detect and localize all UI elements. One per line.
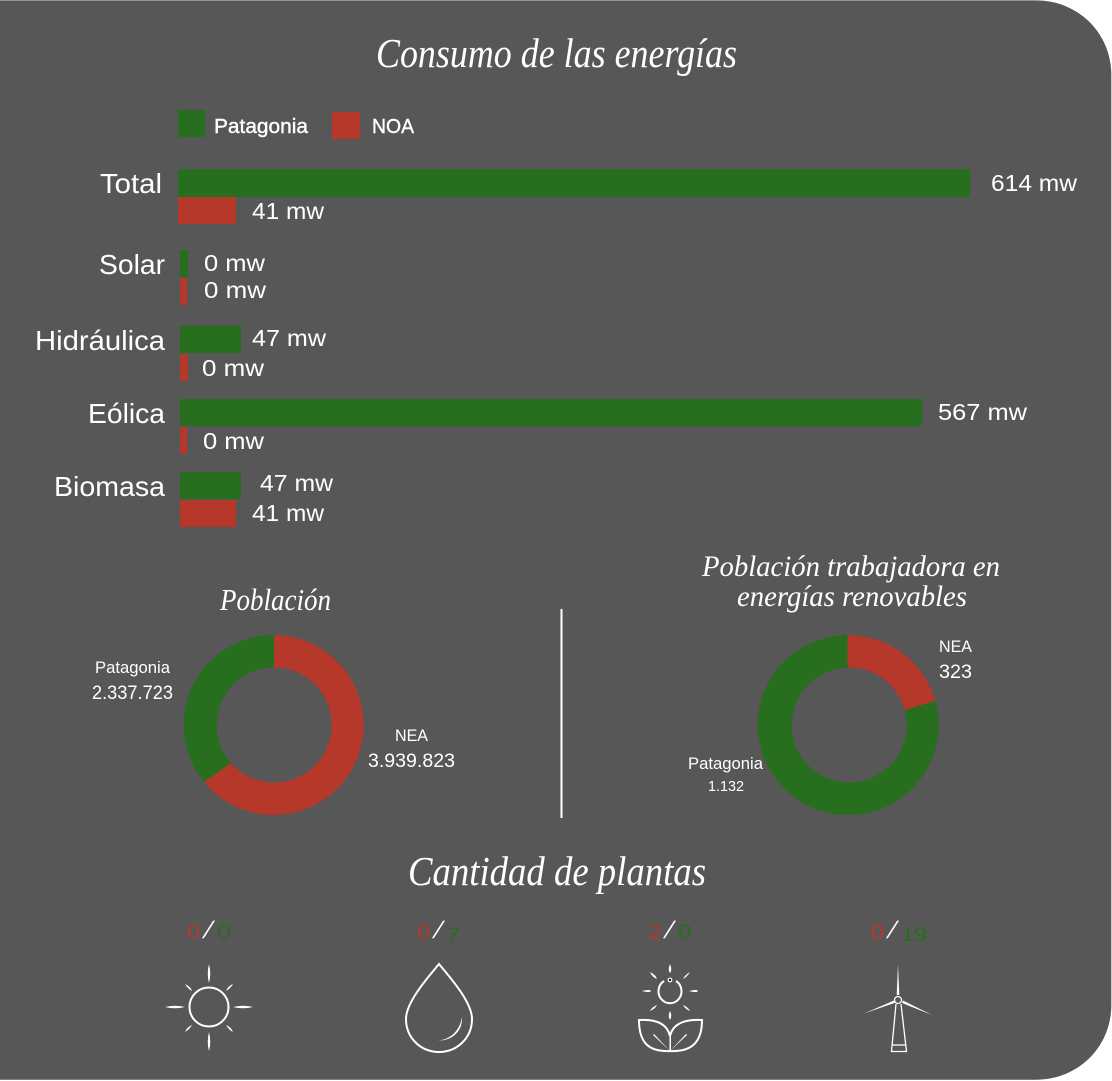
counts: solar: / bbox=[200, 918, 216, 944]
counts: solar: 0 bbox=[187, 921, 200, 944]
legend: Patagonia bbox=[214, 116, 309, 138]
donut chart: población: Patagonia bbox=[95, 659, 171, 677]
row: Eólica: 567 mw bbox=[938, 399, 1027, 425]
divider bbox=[560, 609, 562, 818]
heading: población: Población bbox=[219, 582, 331, 617]
row: Hidráulica: Hidráulica bbox=[35, 325, 165, 356]
row: Total bbox=[100, 168, 1077, 224]
icon: plant with sun bbox=[639, 964, 702, 1051]
donut chart: población trabajadora: 1.132 bbox=[708, 778, 744, 795]
heading: cantidad de plantas: Cantidad de plantas bbox=[408, 848, 706, 894]
counts: hidráulica: 7 bbox=[447, 924, 460, 947]
counts: solar: 0 bbox=[217, 921, 231, 944]
row: Total: Total bbox=[100, 168, 162, 199]
row: Hidráulica: 47 mw bbox=[252, 325, 326, 351]
counts: hidráulica: 0 bbox=[417, 921, 430, 944]
donut chart: población: 2.337.723 bbox=[92, 683, 173, 704]
donut chart: población trabajadora: Patagonia bbox=[688, 755, 764, 773]
counts: biomasa: / bbox=[661, 918, 677, 944]
counts: solar bbox=[187, 918, 231, 944]
row: Biomasa: 41 mw bbox=[252, 500, 324, 526]
row: Eólica: Eólica bbox=[88, 398, 165, 429]
row: Total: 41 mw bbox=[252, 198, 324, 224]
row: Eólica: 0 mw bbox=[203, 428, 264, 454]
counts: biomasa bbox=[649, 918, 692, 944]
row: Solar: 0 mw bbox=[204, 250, 265, 276]
counts: hidráulica: / bbox=[430, 918, 446, 944]
row: Solar bbox=[99, 249, 266, 305]
title: Consumo de las energías bbox=[376, 30, 737, 76]
counts: eólica: 0 bbox=[871, 921, 884, 944]
donut chart: población: 3.939.823 bbox=[368, 751, 455, 772]
row: Biomasa bbox=[54, 470, 333, 527]
legend bbox=[178, 110, 415, 139]
counts: biomasa: 2 bbox=[649, 921, 662, 944]
donut chart: población trabajadora: 323 bbox=[939, 662, 972, 683]
row: Hidráulica bbox=[35, 325, 326, 381]
icon: water drop bbox=[406, 964, 472, 1052]
counts: eólica: / bbox=[884, 918, 900, 944]
row: Solar: Solar bbox=[99, 249, 165, 280]
legend: NOA bbox=[372, 116, 415, 138]
donut chart: población trabajadora: NEA bbox=[939, 638, 972, 656]
row: Eólica bbox=[88, 398, 1027, 454]
counts: hidráulica bbox=[417, 918, 460, 947]
counts: eólica: 19 bbox=[901, 923, 927, 946]
heading: población trabajadora: Población trabajadora en bbox=[701, 550, 1000, 583]
row: Biomasa: Biomasa bbox=[54, 471, 165, 502]
heading: población trabajadora bbox=[701, 550, 1000, 613]
counts: biomasa: 0 bbox=[678, 921, 692, 944]
donut chart: población trabajadora bbox=[688, 635, 972, 815]
heading: población trabajadora: energías renovables bbox=[737, 580, 967, 613]
bar chart: consumo bbox=[35, 168, 1077, 527]
donut chart: población bbox=[92, 635, 455, 815]
donut chart: población: NEA bbox=[395, 727, 428, 745]
icon: sun bbox=[165, 964, 253, 1051]
row: Solar: 0 mw bbox=[204, 277, 266, 303]
counts: eólica bbox=[871, 918, 927, 946]
row: Hidráulica: 0 mw bbox=[202, 355, 264, 381]
row: Biomasa: 47 mw bbox=[260, 470, 333, 496]
row: Total: 614 mw bbox=[991, 170, 1077, 196]
icon: wind turbine bbox=[864, 964, 932, 1052]
